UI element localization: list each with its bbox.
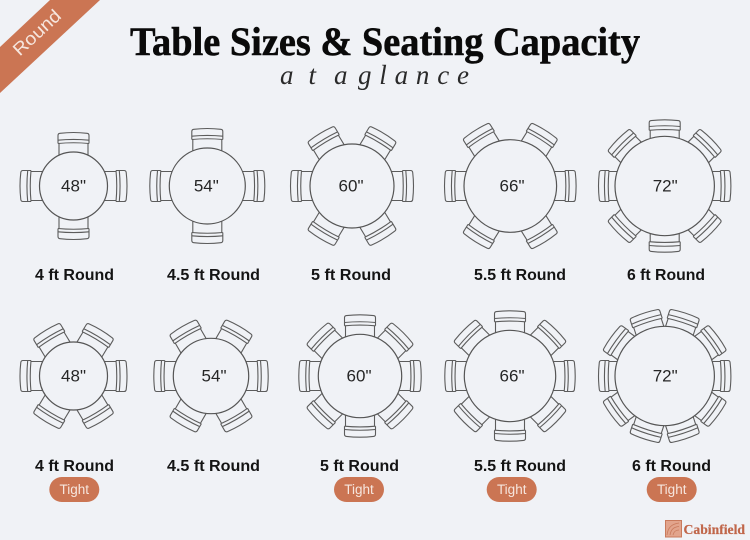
corner ribbon: Round: Round [9, 6, 65, 60]
table: 60 inch, 6 seats: 60" [339, 176, 363, 196]
table: 54 inch, 6 seats: 54" [202, 366, 226, 386]
table: 72 inch, 10 seats: 72" [653, 366, 678, 386]
table: 72 inch, 8 seats [598, 120, 731, 252]
label: 5 ft Round: 5 ft Round [311, 267, 391, 284]
table: 66 inch, 8 seats: 66" [500, 366, 524, 386]
label: 4 ft Round: 4 ft Round [35, 267, 114, 284]
label: 4.5 ft Round tight: 4.5 ft Round [167, 458, 260, 475]
label: 5 ft Round tight: 5 ft Round [320, 458, 399, 475]
table: 54 inch, 4 seats: 54" [194, 176, 219, 196]
table: 54 inch, 4 seats [150, 128, 265, 244]
table: 48 inch, 4 seats [20, 132, 127, 240]
table: 66 inch, 8 seats [445, 311, 575, 441]
label: 6 ft Round: 6 ft Round [627, 267, 705, 284]
logo: Cabinfield [666, 520, 745, 537]
table: 60 inch, 8 seats: 60" [347, 366, 371, 386]
label: 4.5 ft Round: 4.5 ft Round [167, 267, 260, 284]
badge: Tight: Tight [657, 482, 687, 497]
table: 72 inch, 10 seats [598, 308, 731, 444]
corner ribbon: Round [0, 0, 100, 93]
label: 5.5 ft Round tight: 5.5 ft Round [474, 458, 566, 475]
logo: Cabinfield: Cabinfield [684, 522, 745, 537]
table: 72 inch, 8 seats: 72" [653, 176, 678, 196]
label: 6 ft Round tight: 6 ft Round [632, 458, 711, 475]
badge: Tight [487, 477, 537, 502]
badge: Tight [647, 477, 697, 502]
table: 66 inch, 6 seats: 66" [500, 176, 524, 196]
subtitle: at [280, 60, 317, 90]
badge: Tight: Tight [344, 482, 374, 497]
label: 4 ft Round tight: 4 ft Round [35, 458, 114, 475]
subtitle: glance [358, 60, 469, 90]
table: 66 inch, 6 seats [444, 122, 576, 250]
table: 48 inch, 6 seats [20, 322, 127, 430]
subtitle [280, 60, 469, 90]
badge: Tight [49, 477, 99, 502]
subtitle: a [334, 60, 348, 90]
table: 48 inch, 6 seats: 48" [61, 366, 86, 386]
table: 60 inch, 6 seats [290, 125, 414, 247]
badge: Tight: Tight [497, 482, 527, 497]
badge: Tight [334, 477, 384, 502]
table: 48 inch, 4 seats: 48" [61, 176, 86, 196]
table: 54 inch, 6 seats [154, 319, 268, 433]
label: 5.5 ft Round: 5.5 ft Round [474, 267, 566, 284]
badge: Tight: Tight [60, 482, 89, 497]
title: Table Sizes & Seating Capacity [130, 19, 640, 64]
table: 60 inch, 8 seats [299, 315, 421, 437]
